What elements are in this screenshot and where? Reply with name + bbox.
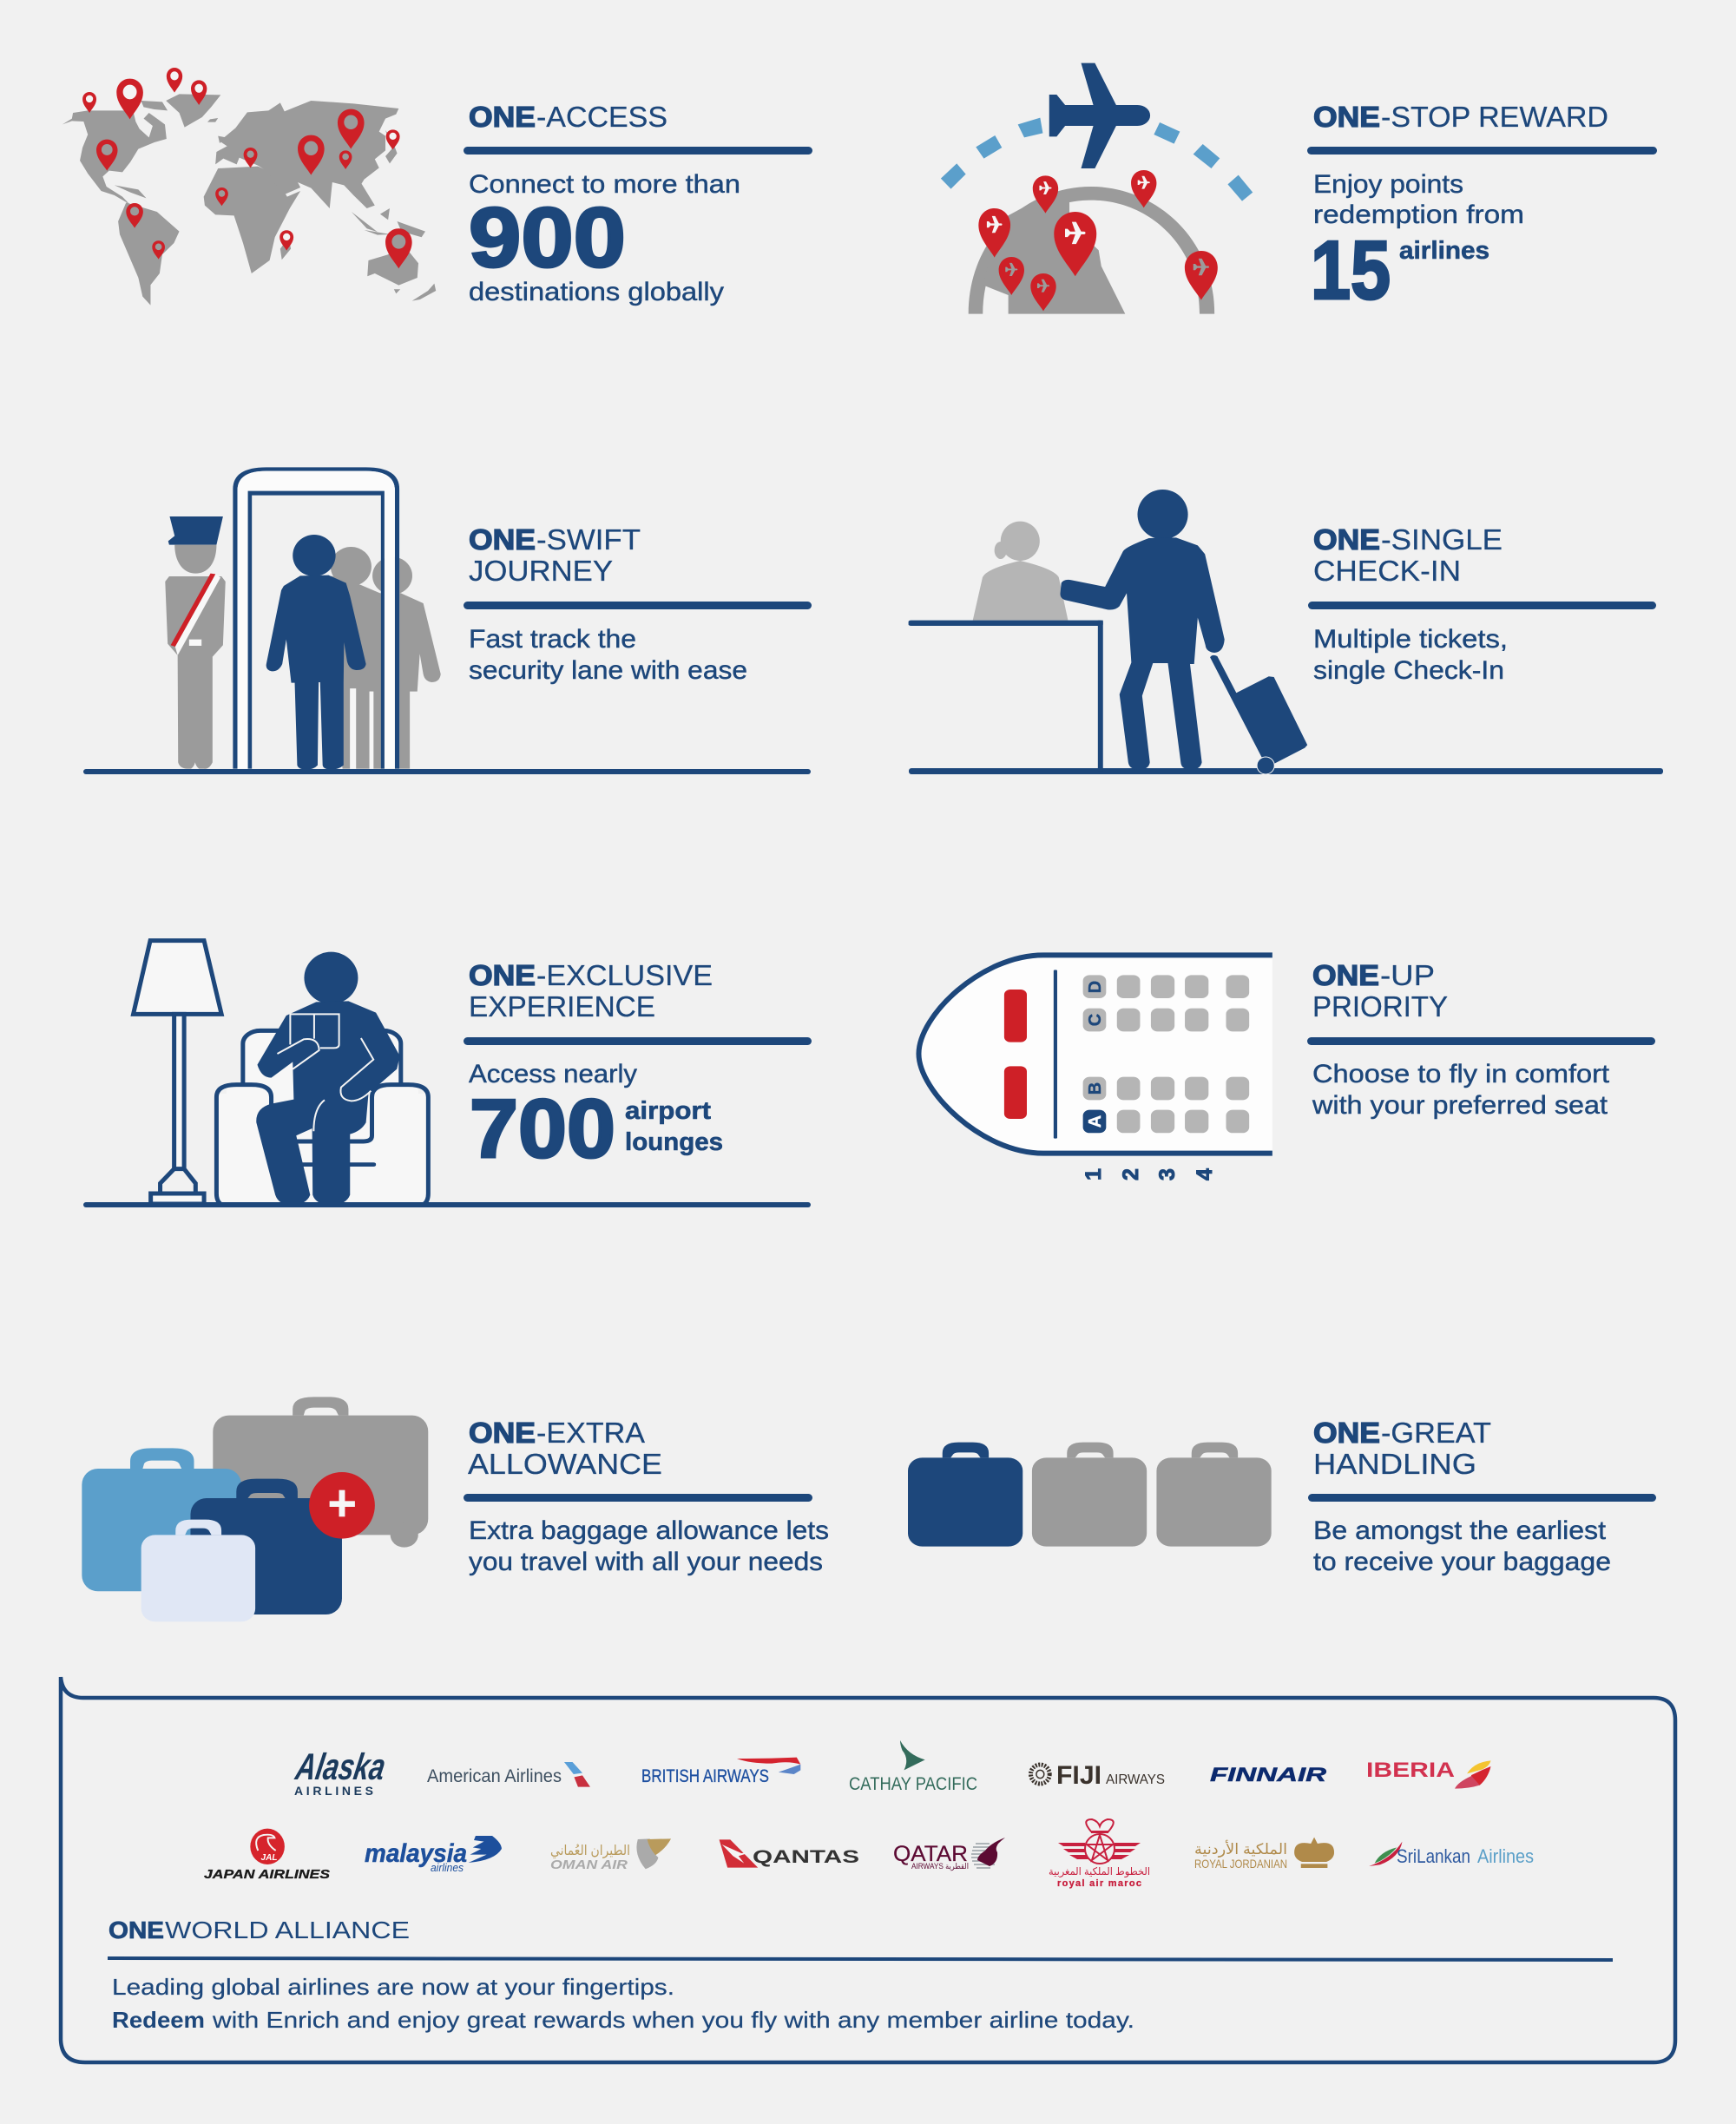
row numbers: 2 bbox=[1119, 1168, 1143, 1180]
heading: one-exclusive experience bbox=[469, 959, 713, 1023]
row numbers bbox=[1082, 1168, 1217, 1180]
text: one-exclusive description: 700 bbox=[470, 1082, 615, 1175]
heading: one-stop reward: ONE bbox=[1313, 101, 1380, 133]
text: one-up description: Choose to fly in comfort bbox=[1312, 1060, 1610, 1088]
heading: one-single check-in: -SINGLE bbox=[1381, 523, 1503, 556]
icon: security gate with guard and passengers bbox=[165, 467, 441, 770]
text: alliance description: with Enrich and enjoy great rewards when you fly with any member airline today. bbox=[212, 2007, 1134, 2033]
text: one-exclusive description: lounges bbox=[625, 1128, 723, 1156]
text: one-access description: Connect to more than bbox=[469, 170, 740, 199]
heading: one-single check-in bbox=[1313, 523, 1503, 587]
panel: one-stop reward bbox=[941, 63, 1657, 317]
heading: oneworld alliance: WORLD ALLIANCE bbox=[165, 1917, 410, 1943]
text: one-stop description: Enjoy points bbox=[1313, 170, 1463, 199]
logo: Fiji Airways: AIRWAYS bbox=[1106, 1772, 1165, 1787]
logo: Oman Air: الطيران العُماني bbox=[550, 1844, 630, 1859]
heading: one-stop reward: -STOP REWARD bbox=[1381, 101, 1608, 133]
logo: Qatar Airways bbox=[893, 1838, 1005, 1871]
logo: Qatar Airways: QATAR bbox=[893, 1842, 968, 1866]
logo: Qatar Airways: AIRWAYS القطرية bbox=[911, 1862, 969, 1871]
logo: Alaska Airlines: Alaska bbox=[293, 1746, 389, 1788]
logo: Royal Jordanian: الملكية الأردنية bbox=[1194, 1840, 1287, 1858]
logo: Iberia: IBERIA bbox=[1366, 1759, 1455, 1782]
panel: one-extra allowance bbox=[82, 1397, 829, 1621]
text: one-exclusive description: Access nearly bbox=[469, 1060, 637, 1088]
text: one-stop description: 15 bbox=[1311, 224, 1391, 317]
logo: Oman Air bbox=[550, 1838, 671, 1872]
text: one-access description: destinations globally bbox=[469, 278, 724, 306]
heading: one-access: -ACCESS bbox=[536, 101, 667, 133]
heading: one-extra allowance: ALLOWANCE bbox=[468, 1448, 662, 1480]
heading: one-extra allowance bbox=[468, 1417, 662, 1480]
icon: world map with pins bbox=[62, 68, 436, 306]
text: one-swift description bbox=[469, 625, 747, 685]
logo: British Airways bbox=[641, 1758, 800, 1786]
logo: Royal Air Maroc bbox=[1049, 1819, 1150, 1889]
logo: Malaysia Airlines: airlines bbox=[431, 1861, 464, 1874]
logo: Finnair: FINNAIR bbox=[1210, 1764, 1326, 1785]
heading: one-extra allowance: -EXTRA bbox=[536, 1417, 645, 1449]
logo: Japan Airlines: JAPAN AIRLINES bbox=[204, 1867, 330, 1882]
heading: one-up priority: -UP bbox=[1380, 959, 1435, 991]
heading: one-swift journey: -SWIFT bbox=[536, 523, 641, 556]
panel: oneworld alliance bbox=[61, 1677, 1675, 2062]
icon: stacked baggage with plus bbox=[82, 1397, 428, 1621]
icon: plane over globe with pins bbox=[941, 63, 1253, 314]
icon: three bags, first highlighted bbox=[908, 1443, 1272, 1547]
icon: aircraft seat map bbox=[918, 955, 1272, 1154]
logo: Malaysia Airlines bbox=[365, 1836, 502, 1874]
heading: one-access: ONE bbox=[469, 101, 536, 133]
logo: Alaska Airlines bbox=[293, 1746, 389, 1798]
heading: one-exclusive experience: ONE bbox=[469, 959, 536, 991]
logo: Royal Air Maroc: royal air maroc bbox=[1057, 1878, 1141, 1889]
heading: one-swift journey bbox=[469, 523, 641, 587]
logo: Iberia bbox=[1366, 1759, 1491, 1789]
text: one-great description: Be amongst the earliest bbox=[1313, 1516, 1607, 1545]
logo: Japan Airlines: JAL bbox=[261, 1853, 277, 1863]
heading: one-extra allowance: ONE bbox=[469, 1417, 536, 1449]
heading: one-up priority bbox=[1312, 959, 1448, 1023]
text: one-exclusive description bbox=[469, 1060, 723, 1175]
seat letters bbox=[1086, 981, 1105, 1128]
panel: one-access bbox=[62, 68, 812, 306]
text: one-single description: single Check-In bbox=[1313, 656, 1504, 685]
logo: Malaysia Airlines: malaysia bbox=[365, 1839, 467, 1868]
logo: Royal Air Maroc: الخطوط الملكية المغربية bbox=[1049, 1865, 1150, 1878]
panel: one-exclusive experience bbox=[83, 941, 812, 1207]
text: one-up description bbox=[1312, 1060, 1610, 1120]
text: alliance description: Leading global airlines are now at your fingertips. bbox=[112, 1974, 674, 2000]
heading: one-exclusive experience: -EXCLUSIVE bbox=[536, 959, 713, 991]
panel: one-single check-in bbox=[909, 490, 1663, 774]
panel: one-swift journey bbox=[83, 467, 812, 774]
heading: one-access bbox=[469, 101, 667, 133]
heading: one-up priority: PRIORITY bbox=[1312, 990, 1448, 1023]
text: one-extra description: you travel with all your needs bbox=[469, 1548, 823, 1576]
icon: reader in armchair beside lamp bbox=[134, 941, 428, 1205]
logo: Cathay Pacific: CATHAY PACIFIC bbox=[849, 1774, 977, 1794]
heading: one-great handling: ONE bbox=[1313, 1417, 1380, 1449]
text: alliance description: Redeem bbox=[112, 2007, 205, 2033]
text: one-stop description: airlines bbox=[1399, 237, 1489, 265]
heading: one-great handling bbox=[1313, 1417, 1491, 1480]
panel: one-great handling bbox=[908, 1417, 1656, 1576]
row numbers: 4 bbox=[1193, 1168, 1217, 1180]
seat letters: B bbox=[1086, 1082, 1105, 1095]
text: one-swift description: Fast track the bbox=[469, 625, 636, 654]
heading: one-great handling: HANDLING bbox=[1313, 1448, 1476, 1480]
text: one-extra description: Extra baggage allowance lets bbox=[469, 1516, 829, 1545]
logo: American Airlines bbox=[427, 1762, 590, 1787]
logo: Royal Jordanian bbox=[1194, 1838, 1334, 1871]
text: one-access description bbox=[469, 170, 740, 306]
seat letters: C bbox=[1086, 1014, 1105, 1026]
logo: Fiji Airways: FIJI bbox=[1056, 1761, 1101, 1790]
logo: Qantas: QANTAS bbox=[753, 1847, 859, 1867]
heading: one-single check-in: ONE bbox=[1313, 523, 1380, 556]
text: one-up description: with your preferred seat bbox=[1312, 1091, 1608, 1120]
text: one-great description: to receive your baggage bbox=[1313, 1548, 1611, 1576]
logo: Fiji Airways bbox=[1031, 1761, 1165, 1790]
row numbers: 3 bbox=[1155, 1168, 1180, 1180]
heading: one-great handling: -GREAT bbox=[1381, 1417, 1491, 1449]
text: one-swift description: security lane with ease bbox=[469, 656, 747, 685]
heading: one-single check-in: CHECK-IN bbox=[1313, 555, 1461, 587]
logo: Royal Jordanian: ROYAL JORDANIAN bbox=[1194, 1857, 1287, 1871]
logo: Japan Airlines bbox=[204, 1829, 330, 1882]
text: one-great description bbox=[1313, 1516, 1611, 1576]
text: one-stop description bbox=[1311, 170, 1524, 317]
seat letters: D bbox=[1086, 981, 1105, 993]
logo: SriLankan Airlines: Airlines bbox=[1477, 1845, 1534, 1867]
text: one-access description: 900 bbox=[469, 190, 626, 285]
heading: one-exclusive experience: EXPERIENCE bbox=[469, 990, 655, 1023]
panel: one-up priority bbox=[918, 955, 1655, 1180]
row numbers: 1 bbox=[1082, 1168, 1106, 1180]
logo: Cathay Pacific bbox=[849, 1740, 977, 1794]
text: one-single description bbox=[1313, 625, 1508, 685]
heading: oneworld alliance: ONE bbox=[108, 1917, 164, 1943]
text: one-single description: Multiple tickets, bbox=[1313, 625, 1508, 654]
text: one-stop description: redemption from bbox=[1313, 201, 1524, 229]
text: alliance description bbox=[112, 1974, 1134, 2033]
logo: SriLankan Airlines bbox=[1369, 1842, 1534, 1867]
logo: Alaska Airlines: AIRLINES bbox=[294, 1784, 373, 1798]
heading: one-up priority: ONE bbox=[1312, 959, 1379, 991]
text: one-extra description bbox=[469, 1516, 829, 1576]
seat letters: A bbox=[1086, 1115, 1105, 1128]
heading: one-swift journey: JOURNEY bbox=[469, 555, 613, 587]
text: one-exclusive description: airport bbox=[625, 1097, 711, 1125]
logo: British Airways: BRITISH AIRWAYS bbox=[641, 1766, 769, 1786]
logo: Qantas bbox=[720, 1839, 859, 1868]
logo: American Airlines: American Airlines bbox=[427, 1766, 562, 1786]
heading: one-swift journey: ONE bbox=[469, 523, 536, 556]
logo: SriLankan Airlines: SriLankan bbox=[1397, 1845, 1470, 1867]
logo: Oman Air: OMAN AIR bbox=[550, 1858, 628, 1872]
icon: check-in counter, agent and traveller bbox=[909, 490, 1307, 774]
